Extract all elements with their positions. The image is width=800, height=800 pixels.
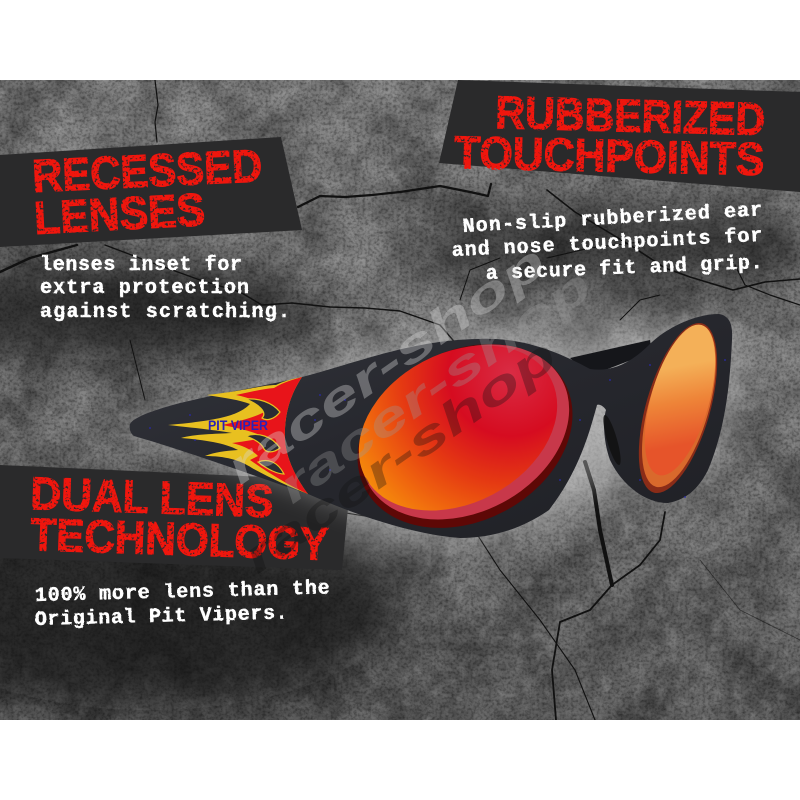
heading: rubberized touchpoints: RUBBERIZED	[495, 86, 766, 145]
heading: dual lens technology: TECHNOLOGY	[30, 508, 329, 570]
frame	[130, 314, 732, 538]
panel: recessed lenses	[0, 137, 302, 324]
description text	[35, 577, 330, 632]
side lens	[623, 315, 733, 501]
heading: dual lens technology: DUAL LENS	[30, 467, 274, 527]
heading banner	[0, 137, 302, 247]
panel: dual lens technology	[0, 465, 348, 632]
heading: rubberized touchpoints	[454, 86, 766, 185]
description text	[40, 254, 290, 324]
description text: Original Pit Vipers.	[35, 602, 288, 632]
heading banner	[0, 465, 348, 570]
description text: extra protection	[40, 277, 249, 300]
description text	[451, 199, 763, 286]
heading: rubberized touchpoints: TOUCHPOINTS	[454, 126, 765, 185]
description text: and nose touchpoints for	[451, 225, 763, 263]
description text: against scratching.	[40, 301, 290, 324]
watermark: racer-shop: racer-shop	[233, 328, 566, 583]
description text: Non-slip rubberized ear	[462, 199, 763, 239]
description text: a secure fit and grip.	[485, 252, 763, 286]
heading banner	[439, 80, 800, 192]
description text: lenses inset for	[40, 254, 242, 277]
cracked concrete background	[0, 80, 800, 720]
temple logo: PIT VIPER	[208, 417, 268, 433]
heading: recessed lenses: RECESSED	[31, 139, 263, 202]
heading: recessed lenses	[31, 139, 263, 244]
glow behind glasses	[130, 314, 732, 537]
blue speckles on frame	[149, 359, 726, 498]
heading: recessed lenses: LENSES	[33, 183, 206, 244]
flame graphic on temple	[168, 377, 308, 494]
sunglasses	[130, 308, 733, 564]
watermark: racer-shop: racer-shop	[216, 235, 555, 494]
heading: dual lens technology	[30, 467, 329, 570]
watermark: racer-shop	[216, 235, 601, 583]
far temple arm	[570, 340, 652, 372]
description text: 100% more lens than the	[35, 577, 330, 608]
main lens	[325, 308, 605, 564]
panel: rubberized touchpoints	[439, 80, 800, 286]
nose pad	[600, 414, 624, 466]
watermark: racer-shop: racer-shop	[268, 258, 601, 513]
